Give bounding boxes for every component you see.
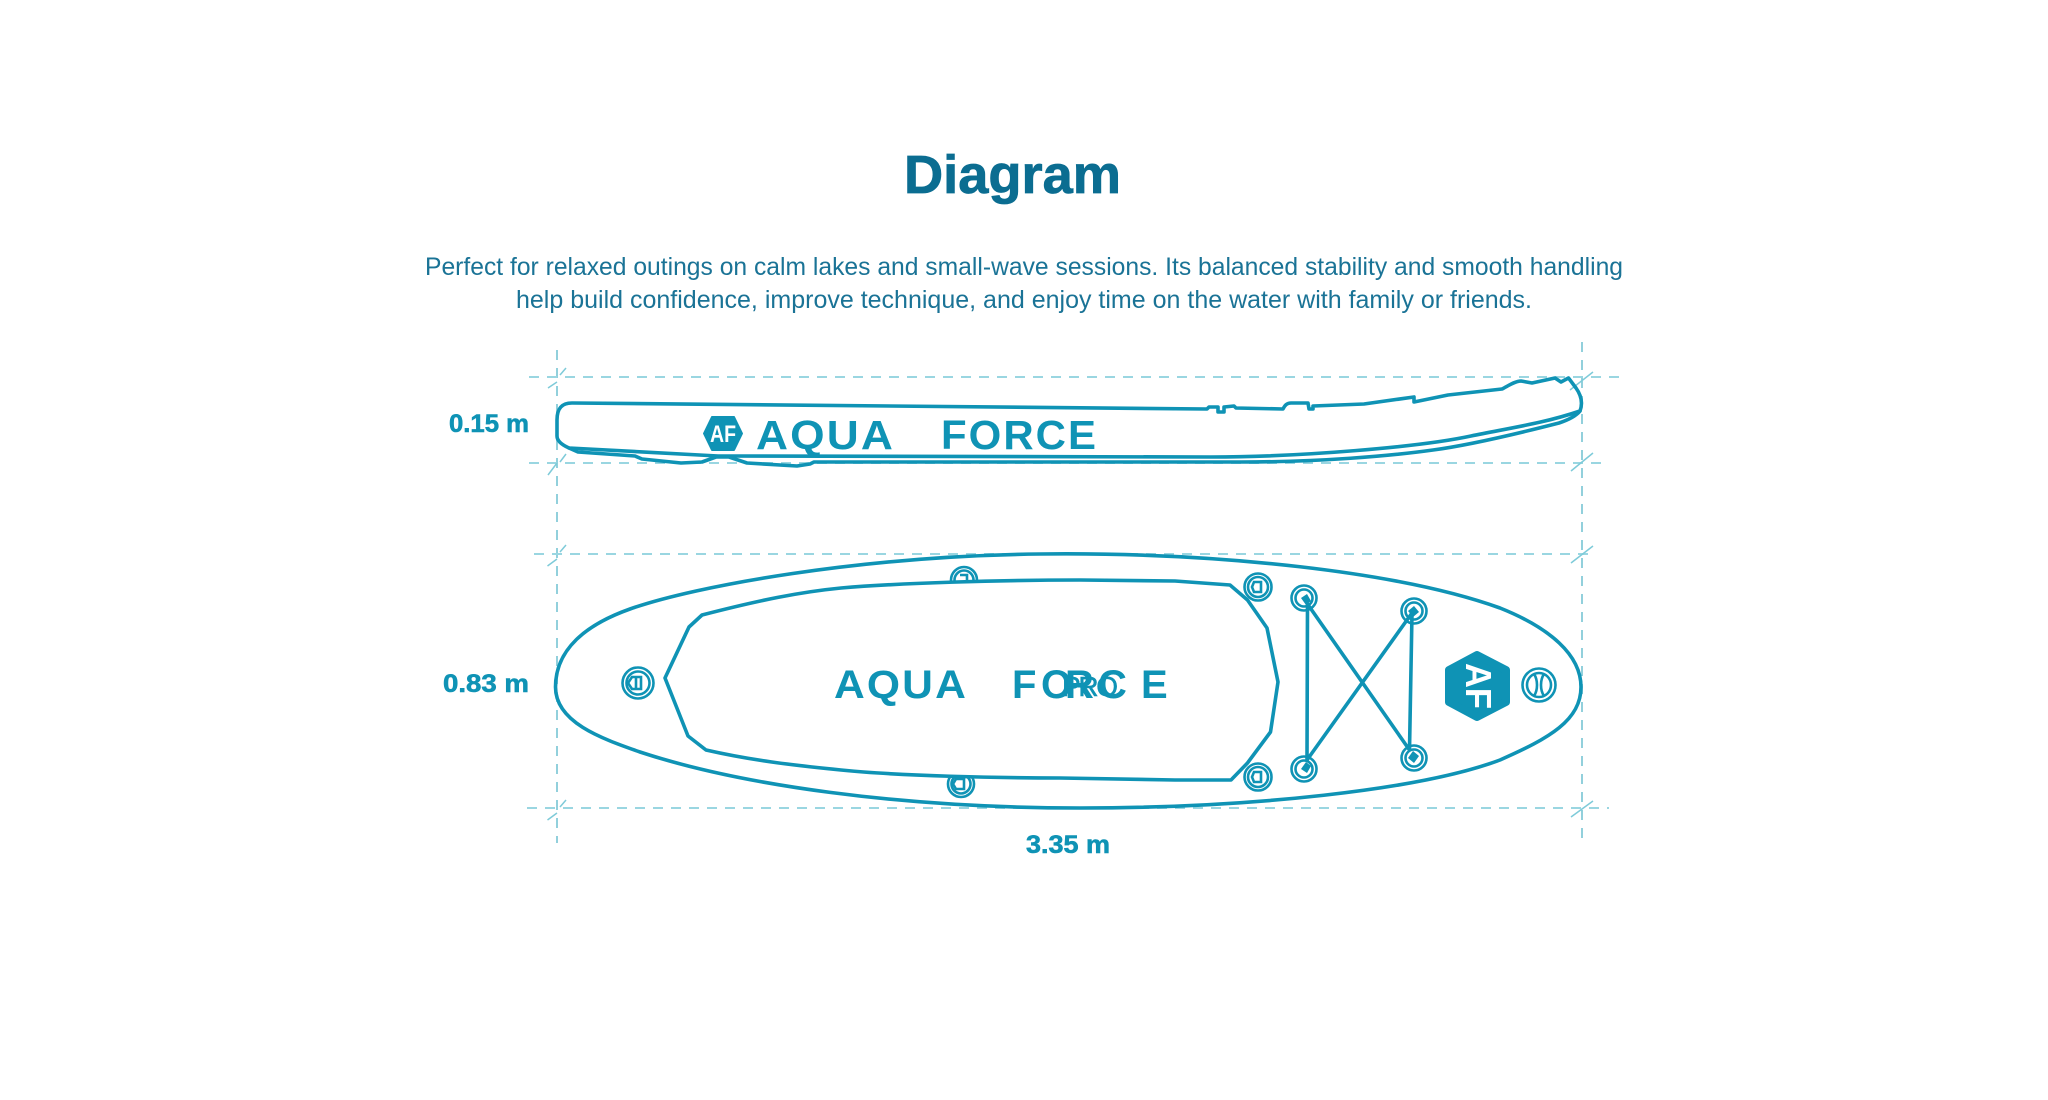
side view logo badge: AF xyxy=(710,421,736,448)
description text: Perfect for relaxed outings on calm lakes and small-wave sessions. Its balanced stability and smooth handling xyxy=(425,253,1623,281)
title: Diagram xyxy=(904,145,1121,205)
deck brand wordmark: AQUA xyxy=(834,663,968,707)
side view brand wordmark: AQUA xyxy=(756,412,895,458)
side view outline: deck and tail xyxy=(557,378,1581,457)
label: thickness: 0.15 m xyxy=(449,410,529,438)
side view brand wordmark: FORCE xyxy=(941,412,1098,458)
description text xyxy=(425,253,1623,314)
nose ring xyxy=(1522,668,1556,702)
side view brand wordmark xyxy=(756,412,1098,458)
label: width: 0.83 m xyxy=(443,670,529,698)
tail D-ring xyxy=(622,668,654,698)
top view of board xyxy=(556,554,1581,808)
board outer outline xyxy=(556,554,1581,808)
description text: help build confidence, improve technique, and enjoy time on the water with family or friends. xyxy=(516,286,1532,314)
side view logo badge xyxy=(704,417,742,450)
nose logo badge xyxy=(1449,655,1506,717)
label: length: 3.35 m xyxy=(1026,831,1110,859)
deck pad outline xyxy=(665,580,1278,780)
lower rail D-ring xyxy=(946,778,976,798)
bungee cords xyxy=(1307,604,1412,760)
deck brand wordmark: FORCE xyxy=(1012,663,1168,707)
upper front D-ring xyxy=(1244,574,1272,600)
nose logo badge: AF xyxy=(1458,663,1499,709)
bungee anchor rings xyxy=(1292,586,1426,782)
upper rail D-ring xyxy=(950,566,978,580)
deck brand wordmark xyxy=(834,663,1168,707)
side view of board xyxy=(557,378,1581,466)
deck brand wordmark: PRO xyxy=(1062,671,1118,702)
side view outline: underside rocker xyxy=(569,411,1580,466)
dimension guide lines xyxy=(527,342,1624,843)
lower front D-ring xyxy=(1244,764,1272,790)
